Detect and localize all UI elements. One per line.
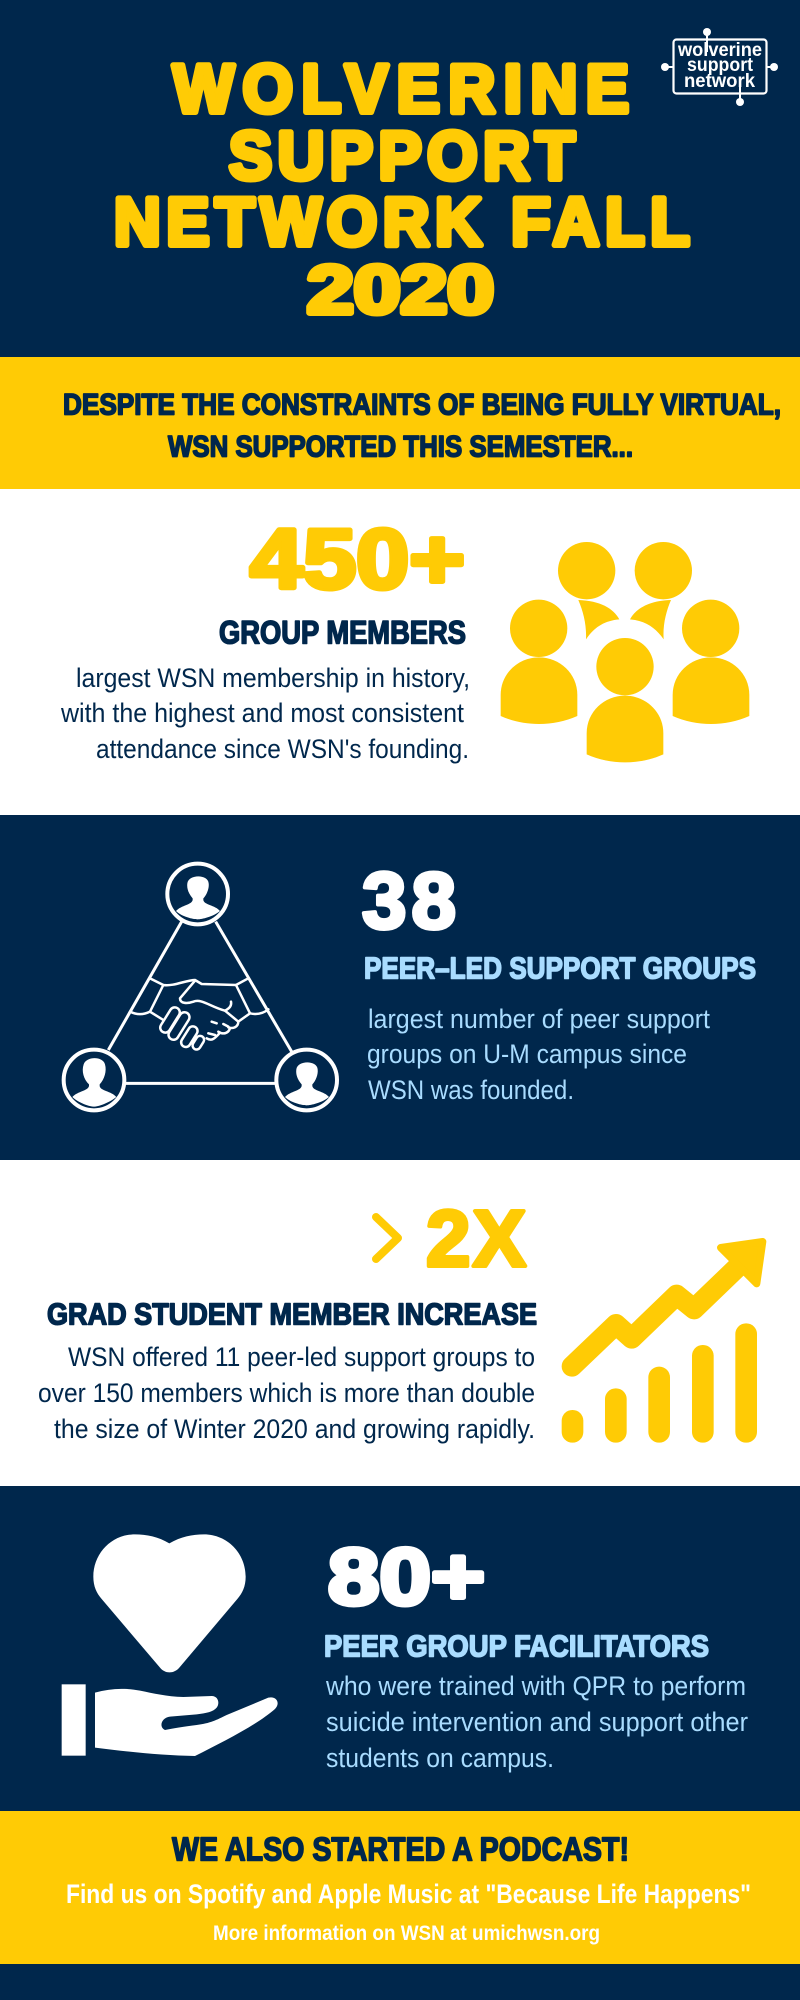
icon: heart above open hand xyxy=(62,1534,278,1756)
stat: 38: 38 xyxy=(362,856,456,945)
icon: growth chart xyxy=(562,1242,763,1443)
stat: 450+: 450+ xyxy=(250,512,465,606)
description: WSN offered 11 peer-led support groups to xyxy=(68,1342,535,1372)
title: SUPPORT xyxy=(229,119,575,194)
banner text: WSN SUPPORTED THIS SEMESTER... xyxy=(168,430,633,464)
icon: group of people xyxy=(501,542,749,762)
description: over 150 members which is more than double xyxy=(38,1378,535,1408)
heading: podcast: WE ALSO STARTED A PODCAST! xyxy=(172,1830,629,1868)
description: the size of Winter 2020 and growing rapidly. xyxy=(54,1414,535,1444)
panel background xyxy=(0,815,800,1160)
banner text xyxy=(63,388,781,464)
description: attendance since WSN's founding. xyxy=(96,734,469,764)
stat: 80+: 80+ xyxy=(328,1532,485,1621)
panel: peer group facilitators xyxy=(0,1486,800,1811)
title: WOLVERINE xyxy=(173,52,629,127)
icon: greater-than sign xyxy=(376,1217,398,1259)
footer background xyxy=(0,1811,800,1964)
person nodes xyxy=(64,864,337,1110)
triangle lines xyxy=(108,922,292,1083)
description xyxy=(38,1342,535,1444)
panel background xyxy=(0,1486,800,1811)
description: students on campus. xyxy=(326,1743,554,1773)
description: with the highest and most consistent xyxy=(60,698,464,728)
title: 2020 xyxy=(307,252,494,328)
heading: peer group facilitators: PEER GROUP FACILITATORS xyxy=(324,1628,709,1664)
bottom band xyxy=(0,1964,800,2000)
description: groups on U-M campus since xyxy=(367,1039,687,1069)
header background xyxy=(0,0,800,357)
title xyxy=(114,52,690,328)
logo: wolverine support network: wolverine xyxy=(677,40,762,61)
panel: podcast footer xyxy=(0,1811,800,1964)
website note: More information on WSN at umichwsn.org xyxy=(213,1922,600,1945)
description xyxy=(60,663,470,764)
description: largest number of peer support xyxy=(368,1004,710,1034)
panel: header xyxy=(0,0,800,357)
logo: wolverine support network xyxy=(661,28,778,106)
logo: wolverine support network: network xyxy=(684,71,755,92)
heading: grad student member increase: GRAD STUDENT MEMBER INCREASE xyxy=(47,1296,537,1332)
description: who were trained with QPR to perform xyxy=(325,1671,746,1701)
panel background xyxy=(0,489,800,815)
banner background xyxy=(0,357,800,489)
panel: grad student member increase xyxy=(0,1160,800,1486)
logo: wolverine support network: support xyxy=(687,55,754,76)
icon: network triangle with handshake xyxy=(64,864,337,1110)
handshake xyxy=(130,978,268,1051)
description xyxy=(325,1671,748,1773)
description xyxy=(367,1004,710,1105)
panel background xyxy=(0,1160,800,1486)
panel: group members xyxy=(0,489,800,815)
panel: peer-led support groups xyxy=(0,815,800,1160)
description: largest WSN membership in history, xyxy=(76,663,470,693)
description: suicide intervention and support other xyxy=(326,1707,748,1737)
panel: intro banner xyxy=(0,357,800,489)
stat: 2X: 2X xyxy=(426,1194,526,1283)
heading: group members: GROUP MEMBERS xyxy=(219,614,466,650)
description: WSN was founded. xyxy=(368,1075,574,1105)
title: NETWORK FALL xyxy=(114,185,690,260)
